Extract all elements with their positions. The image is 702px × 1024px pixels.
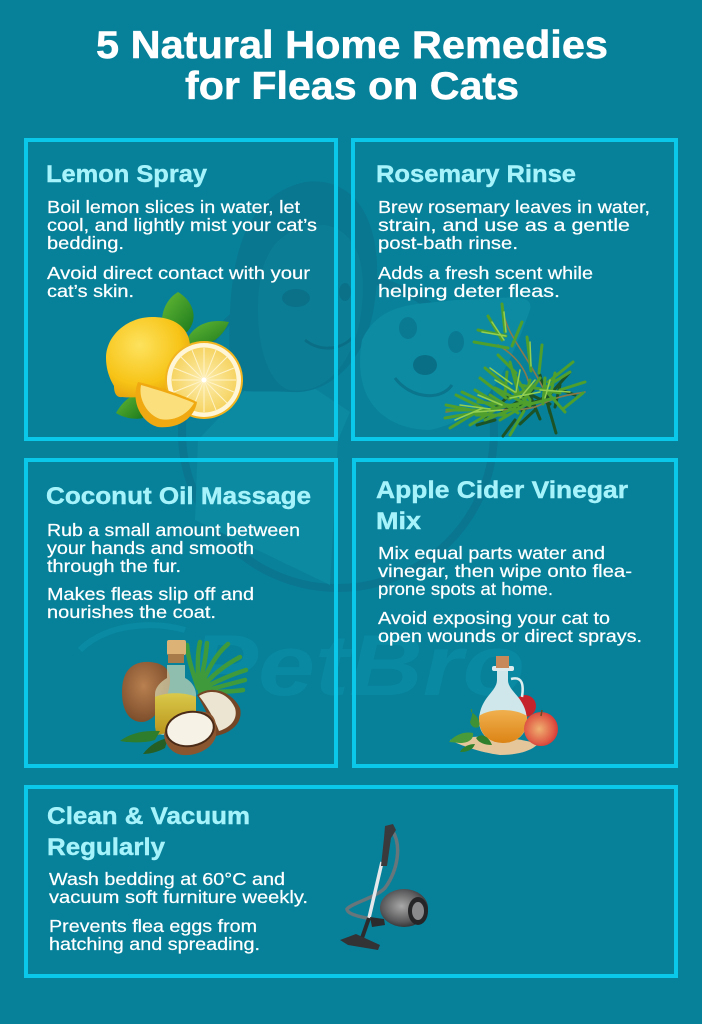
heading: Apple Cider Vinegar Mix xyxy=(376,477,628,535)
panel: Coconut Oil Massage xyxy=(26,460,336,766)
panel: Rosemary Rinse xyxy=(353,140,676,439)
text: lemon instructions: Avoid direct contact with your xyxy=(47,263,310,283)
text: lemon instructions: cat’s skin. xyxy=(47,281,134,301)
text: coconut instructions: Rub a small amount between xyxy=(47,520,300,540)
heading: Coconut Oil Massage: Coconut Oil Massage xyxy=(46,483,311,510)
text: vacuum instructions: Wash bedding at 60°C and xyxy=(49,869,285,889)
panel: Lemon Spray xyxy=(26,140,336,439)
heading: Clean & Vacuum Regularly: Clean & Vacuum xyxy=(47,803,250,830)
text: rosemary instructions: strain, and use as a gentle xyxy=(378,215,630,235)
text: lemon instructions xyxy=(47,197,317,301)
text: lemon instructions: Boil lemon slices in water, let xyxy=(47,197,300,217)
text: rosemary instructions xyxy=(378,197,650,301)
heading: Apple Cider Vinegar Mix: Apple Cider Vinegar xyxy=(376,477,628,504)
title: for Fleas on Cats xyxy=(185,65,519,108)
icon: rosemary sprig xyxy=(445,304,585,436)
heading: Clean & Vacuum Regularly xyxy=(47,803,250,861)
text: coconut instructions: your hands and smooth xyxy=(47,538,254,558)
icon: coconut oil xyxy=(120,640,246,755)
heading: Apple Cider Vinegar Mix: Mix xyxy=(376,508,422,535)
text: rosemary instructions: Adds a fresh scent while xyxy=(378,263,593,283)
text: coconut instructions: Makes fleas slip off and xyxy=(47,584,254,604)
heading: Rosemary Rinse: Rosemary Rinse xyxy=(376,161,576,188)
text: vinegar instructions: vinegar, then wipe onto flea- xyxy=(378,561,632,581)
text: vacuum instructions: vacuum soft furniture weekly. xyxy=(49,887,308,907)
panel: Clean & Vacuum Regularly xyxy=(26,787,676,976)
text: rosemary instructions: Brew rosemary leaves in water, xyxy=(378,197,650,217)
text: vacuum instructions: hatching and spreading. xyxy=(49,934,260,954)
text: lemon instructions: bedding. xyxy=(47,233,124,253)
title: 5 Natural Home Remedies xyxy=(96,24,608,67)
text: vacuum instructions xyxy=(49,869,308,954)
watermark: PetBro logo xyxy=(80,181,530,714)
icon: lemons xyxy=(106,292,243,427)
watermark: PetBro logo: PetBro xyxy=(190,618,525,714)
icon: vacuum cleaner xyxy=(340,824,428,950)
heading: Clean & Vacuum Regularly: Regularly xyxy=(47,834,166,861)
text: coconut instructions xyxy=(47,520,300,622)
text: coconut instructions: through the fur. xyxy=(47,556,181,576)
text: rosemary instructions: post-bath rinse. xyxy=(378,233,518,253)
text: vacuum instructions: Prevents flea eggs from xyxy=(49,916,257,936)
icon: vinegar jug and apples xyxy=(449,656,558,755)
text: vinegar instructions: Avoid exposing your cat to xyxy=(378,608,610,628)
text: vinegar instructions: prone spots at home. xyxy=(378,579,553,599)
title xyxy=(96,24,608,108)
text: lemon instructions: cool, and lightly mist your cat’s xyxy=(47,215,317,235)
panel: Apple Cider Vinegar Mix xyxy=(354,460,676,766)
text: rosemary instructions: helping deter fleas. xyxy=(378,281,560,301)
text: vinegar instructions xyxy=(378,543,642,646)
text: vinegar instructions: Mix equal parts water and xyxy=(378,543,605,563)
heading: Lemon Spray: Lemon Spray xyxy=(46,161,208,188)
text: vinegar instructions: open wounds or direct sprays. xyxy=(378,626,642,646)
text: coconut instructions: nourishes the coat. xyxy=(47,602,216,622)
